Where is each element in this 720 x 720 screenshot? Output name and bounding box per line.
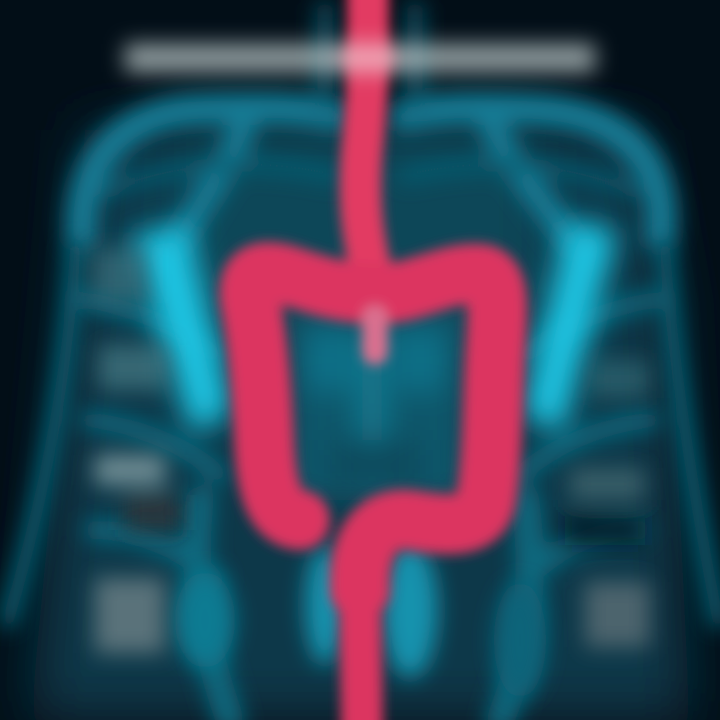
panel: rib cage upper arcs [82, 10, 661, 245]
panel: red digestive tract [249, 0, 497, 720]
left label blocks [92, 248, 180, 653]
right label blocks [565, 360, 650, 647]
oesophagus [360, 0, 372, 275]
colon and rectum [249, 272, 497, 590]
icon: lower pelvic shapes [175, 542, 546, 698]
icon: right bright cartilage wedge [522, 220, 618, 435]
torso glow [30, 120, 690, 720]
panel: lower ribs and body outline [8, 250, 718, 720]
panel: central abdomen [290, 310, 465, 500]
small pink appendix [362, 318, 388, 352]
title bar [125, 44, 595, 72]
icon: left bright cartilage wedge [130, 225, 232, 435]
